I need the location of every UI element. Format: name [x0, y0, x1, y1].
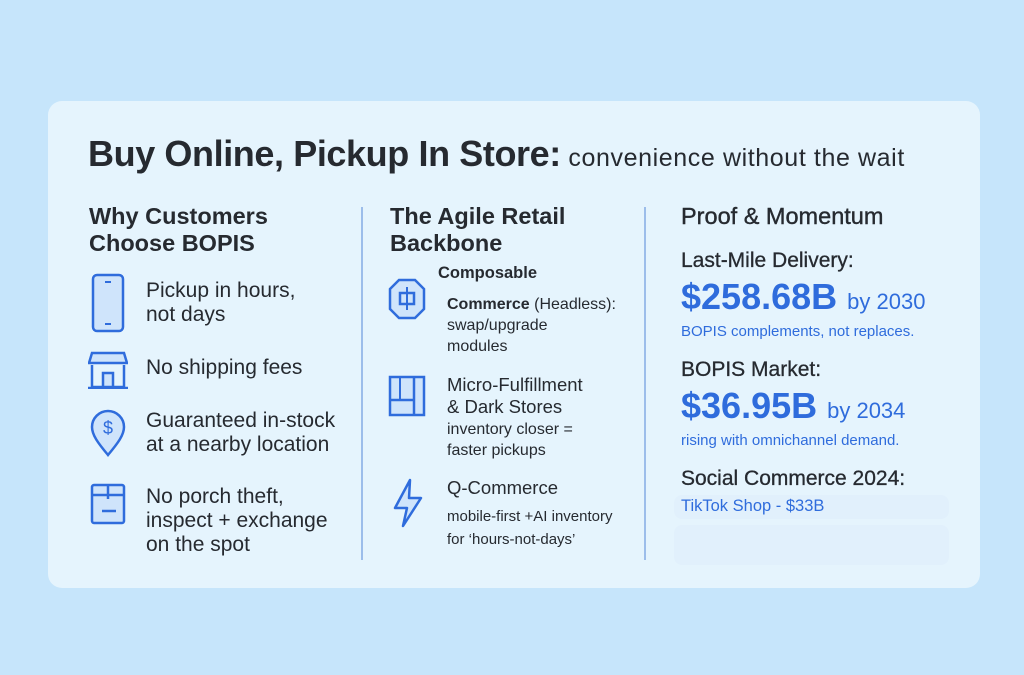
- panel: proof & momentum: $36.95B by 2034: [681, 385, 905, 426]
- stat: social commerce: Social Commerce 2024:: [681, 467, 905, 490]
- title: Buy Online, Pickup In Store: convenience without the wait: [88, 133, 905, 174]
- icon: octagon module: [388, 278, 426, 320]
- panel: proof & momentum: [681, 203, 925, 515]
- text: micro-fulfillment: [447, 374, 583, 417]
- text: guaranteed: [146, 409, 336, 456]
- text: no shipping: No shipping fees: [146, 356, 302, 379]
- heading: [89, 203, 268, 256]
- text: micro-fulfillment: & Dark Stores: [447, 396, 562, 417]
- icon: location dollar: $: [103, 418, 113, 438]
- text: no porch theft: on the spot: [146, 533, 250, 556]
- heading: Choose BOPIS: [89, 230, 255, 256]
- text: micro-fulfillment: Micro-Fulfillment: [447, 374, 583, 395]
- icon: lightning: [394, 478, 422, 528]
- panel: proof & momentum: TikTok Shop - $33B: [681, 497, 824, 515]
- panel: why customers choose BOPIS: [88, 203, 336, 556]
- heading: Backbone: [390, 230, 502, 256]
- stat: bopis market: BOPIS Market:: [681, 358, 821, 381]
- text: no porch theft: No porch theft,: [146, 485, 284, 508]
- heading: [390, 203, 565, 256]
- heading: Proof & Momentum: [681, 203, 883, 229]
- heading: The Agile Retail: [390, 203, 565, 229]
- text: no porch theft: inspect + exchange: [146, 509, 328, 532]
- panel: agile retail backbone: [388, 203, 616, 548]
- text: guaranteed: at a nearby location: [146, 433, 329, 456]
- icon: box: [90, 484, 126, 524]
- panel: proof & momentum: BOPIS complements, not replaces.: [681, 323, 914, 340]
- text: no porch theft: [146, 485, 328, 556]
- panel: agile retail backbone: swap/upgrade: [447, 317, 548, 334]
- text: pickup: not days: [146, 303, 225, 326]
- icon: phone: [92, 274, 124, 332]
- panel: agile retail backbone: Commerce (Headless):: [447, 296, 616, 313]
- text: pickup: Pickup in hours,: [146, 279, 295, 302]
- panel: agile retail backbone: inventory closer =: [447, 421, 573, 438]
- panel: agile retail backbone: for ‘hours-not-days’: [447, 531, 575, 548]
- heading: Why Customers: [89, 203, 268, 229]
- text: guaranteed: Guaranteed in-stock: [146, 409, 335, 432]
- icon: location dollar: [90, 410, 126, 457]
- panel: agile retail backbone: faster pickups: [447, 442, 546, 459]
- icon: store: [88, 352, 128, 389]
- panel: agile retail backbone: mobile-first +AI inventory: [447, 508, 612, 525]
- panel: agile retail backbone: modules: [447, 338, 507, 355]
- stat: last-mile: Last-Mile Delivery:: [681, 249, 854, 272]
- panel: proof & momentum: rising with omnichannel demand.: [681, 432, 899, 449]
- text: q-commerce: Q-Commerce: [447, 477, 558, 498]
- icon: shelves: [388, 376, 426, 416]
- card panel: [48, 101, 980, 588]
- text: pickup: [146, 279, 295, 326]
- text: composable: Composable: [438, 264, 537, 282]
- panel: proof & momentum: $258.68B by 2030: [681, 276, 925, 317]
